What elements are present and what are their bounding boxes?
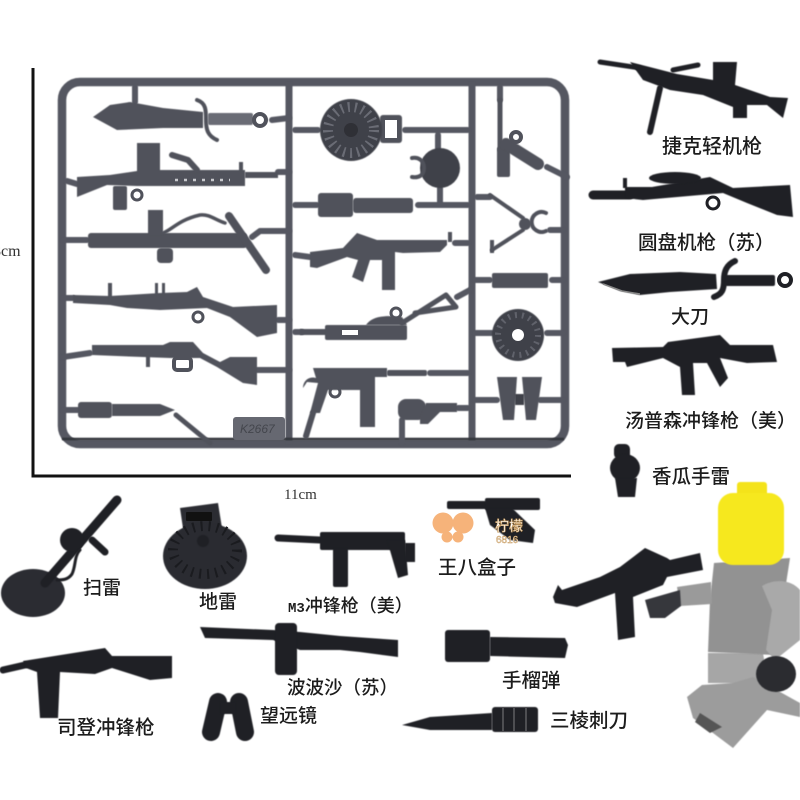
item: sten submachine gun <box>3 648 172 739</box>
item: binoculars <box>211 702 317 732</box>
sprue: thompson <box>310 232 452 290</box>
gun held <box>553 548 703 640</box>
item: stick grenade <box>445 630 568 692</box>
sprue: sword <box>93 100 266 140</box>
item: thompson submachine gun <box>612 335 796 432</box>
item: land mine <box>163 503 247 613</box>
label: M3冲锋枪（美） <box>288 595 413 617</box>
sprue: mine detector <box>88 210 266 270</box>
sprue: pineapple grenade <box>398 399 457 424</box>
label: 扫雷 <box>83 577 121 599</box>
sprue: stick grenade <box>318 193 413 217</box>
label: 捷克轻机枪 <box>662 135 762 158</box>
width label: 11cm <box>284 487 317 503</box>
item: mauser pistol <box>438 498 540 579</box>
label: 三棱刺刀 <box>550 710 628 732</box>
torso <box>708 558 790 655</box>
sprue: land mine <box>320 99 402 161</box>
item: mine detector <box>1 500 121 617</box>
item: ppsh submachine gun <box>200 623 398 698</box>
label: 手榴弹 <box>502 670 561 692</box>
label: 香瓜手雷 <box>652 466 730 488</box>
sprue frame <box>62 82 567 444</box>
lower hand <box>756 656 796 692</box>
label: 王八盒子 <box>438 557 516 579</box>
sprue: mine detector disc <box>412 148 460 188</box>
item: pineapple grenade <box>610 444 730 497</box>
sprue: cylinder <box>492 273 548 288</box>
item: triangular bayonet <box>402 707 628 732</box>
head <box>718 482 784 565</box>
watermark logo <box>432 512 523 546</box>
label: 汤普森冲锋枪（美） <box>625 410 796 432</box>
sprue: disc machine gun rifle <box>73 283 277 337</box>
sprue: round disc with hole <box>492 309 544 361</box>
sprue: light machine gun <box>77 143 278 210</box>
dimension bracket <box>0 68 571 503</box>
label: 地雷 <box>199 591 237 613</box>
label: 望远镜 <box>260 705 317 727</box>
sprue: pistol <box>497 100 538 177</box>
item: disc machine gun <box>593 172 793 254</box>
panel: sprue sheet of weapons <box>62 82 567 444</box>
sprue: bayonet <box>78 402 210 443</box>
right arm <box>762 581 800 660</box>
sprue: bipod <box>490 195 546 253</box>
watermark logo: 柠檬 <box>495 518 523 534</box>
legs <box>687 653 800 748</box>
label: 大刀 <box>671 306 709 328</box>
label: 圆盘机枪（苏） <box>638 231 775 254</box>
sprue: m3 submachine gun <box>303 368 427 436</box>
item: big sword <box>598 261 791 328</box>
gun hand <box>645 590 681 618</box>
watermark logo: 6816 <box>496 535 519 546</box>
sprue: rifle <box>92 342 257 385</box>
left arm <box>677 582 712 606</box>
sprue: gun with folding stock <box>300 295 456 340</box>
sprue: model plate: K2667 <box>240 422 276 436</box>
item: m3 submachine gun <box>278 532 415 617</box>
item: czech light machine gun <box>600 62 788 158</box>
label: 司登冲锋枪 <box>57 717 155 739</box>
label: 波波沙（苏） <box>287 677 398 698</box>
sprue: model plate <box>233 417 285 440</box>
sprue: binoculars <box>497 377 542 420</box>
minifigure with gun <box>553 482 800 748</box>
